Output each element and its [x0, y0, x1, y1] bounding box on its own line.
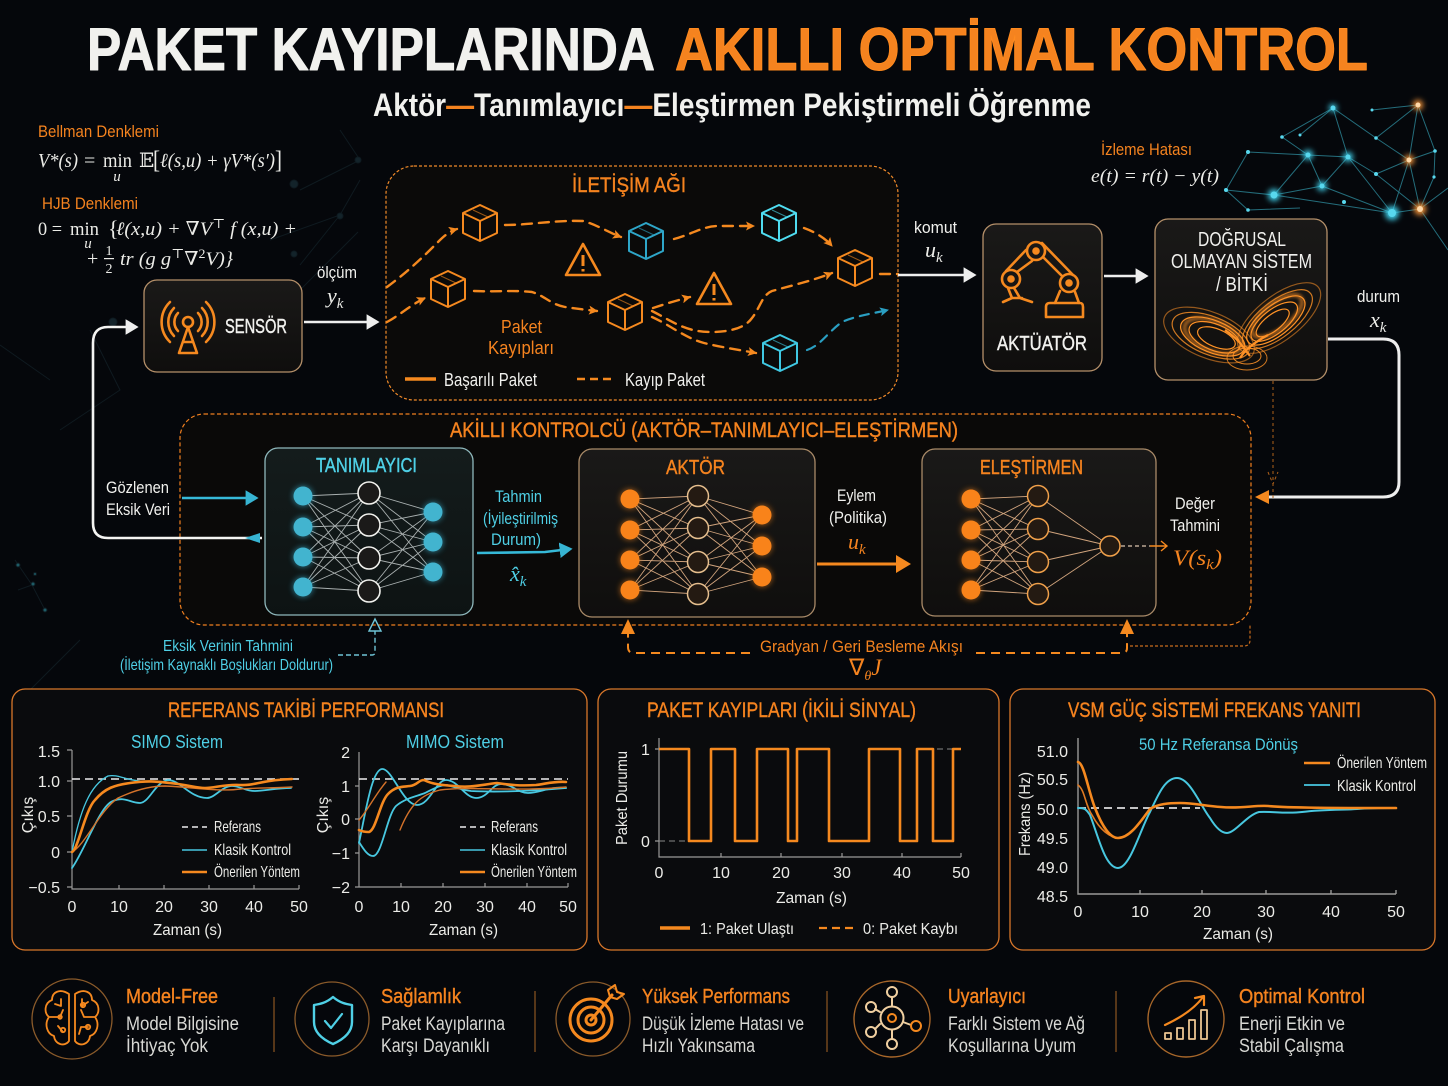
- arrow: network to actuator: [898, 274, 974, 276]
- sensor label: SENSÖR: [225, 316, 287, 338]
- equation: Bellman: ]: [275, 147, 282, 174]
- warning icons: [566, 244, 731, 304]
- equation: Bellman: min: [103, 150, 132, 172]
- feature text: Optimal Kontrol: [1239, 986, 1365, 1008]
- chart: frequency response: 51.0: [1037, 744, 1068, 761]
- feature text: İhtiyaç Yok: [126, 1036, 208, 1057]
- chart: frequency response: [1017, 735, 1427, 943]
- panel: nonlinear plant: [1155, 219, 1332, 380]
- feature: robustness: [295, 982, 505, 1057]
- label: gradient feedback: J: [871, 655, 883, 680]
- label: estimate: (İyileştirilmiş: [483, 509, 558, 528]
- dashed blue packet route: [807, 310, 888, 350]
- feature text: Stabil Çalışma: [1239, 1036, 1344, 1057]
- background network: faint left: [0, 130, 361, 700]
- identifier heading: TANIMLAYICI: [316, 455, 417, 477]
- icon: brain: [32, 979, 112, 1059]
- label: tracking error: İzleme Hatası: [1101, 140, 1192, 159]
- panel: critic: [922, 449, 1156, 616]
- chart: binary packet signal: [614, 738, 970, 938]
- subtitle: Aktör—Tanımlayıcı—Eleştirmen Pekiştirmeli Öğrenme: [373, 87, 1091, 123]
- packet cubes: [431, 205, 872, 371]
- label: estimate: Tahmin: [495, 487, 542, 506]
- arrow: actuator to plant: [1104, 275, 1146, 277]
- panel: VSM frequency response: [1010, 689, 1435, 950]
- packet loss label: [488, 317, 554, 358]
- label: value estimate: k: [1206, 557, 1214, 573]
- label: tracking error: [1091, 140, 1219, 187]
- title: AKILLI OPTİMAL KONTROL: [675, 16, 1368, 83]
- label: command: u: [925, 237, 936, 262]
- icon: hub: [854, 981, 930, 1057]
- chart: binary packet signal: 40: [893, 865, 911, 882]
- chart: SIMO system: 30: [200, 899, 218, 916]
- feature text: Sağlamlık: [381, 986, 462, 1008]
- feature text: Paket Kayıplarına: [381, 1014, 505, 1035]
- plant title: / BİTKİ: [1216, 273, 1268, 296]
- feature: model-free: [32, 979, 239, 1059]
- chart: SIMO system: 1.5: [38, 744, 60, 761]
- feature text: Düşük İzleme Hatası ve: [642, 1014, 804, 1035]
- panel: sensor: [144, 280, 302, 372]
- label: state: durum: [1357, 287, 1400, 306]
- label: value estimate: V(s: [1173, 545, 1202, 570]
- chart: MIMO system: Önerilen Yöntem: [491, 863, 577, 881]
- panel: packet losses: [598, 689, 999, 950]
- chart: SIMO system: 10: [110, 899, 128, 916]
- label: state: k: [1380, 320, 1387, 336]
- chart: SIMO system: Önerilen Yöntem: [214, 863, 300, 881]
- label: value estimate: [1170, 494, 1222, 573]
- chart: frequency response: Klasik Kontrol: [1337, 778, 1416, 795]
- chart: MIMO system: −2: [332, 880, 350, 897]
- chart: frequency response: 30: [1257, 904, 1275, 921]
- feature text: [948, 986, 1085, 1057]
- neural net nodes: [620, 486, 772, 604]
- neural net edges: [630, 496, 762, 594]
- chart: binary packet signal: 1: Paket Ulaştı: [700, 921, 794, 938]
- arrow: critic value output: [1121, 541, 1167, 551]
- equation: HJB: V)}: [206, 249, 233, 270]
- chart: binary packet signal: 0: [641, 834, 650, 851]
- chart: MIMO system: 0: [355, 899, 364, 916]
- equation: HJB: +: [87, 248, 98, 270]
- arrow: observed data to identifier: [182, 497, 256, 499]
- equation: Bellman: =: [84, 150, 95, 172]
- chart: binary packet signal: Zaman (s): [776, 890, 847, 907]
- neural net nodes: [293, 482, 443, 602]
- arrow: identifier to actor: [477, 549, 570, 553]
- chart: frequency response: 50.5: [1037, 772, 1068, 789]
- chart: frequency response: 50 Hz Referansa Dönüş: [1139, 735, 1298, 754]
- chart: SIMO system: 0: [51, 845, 60, 862]
- chart: frequency response: 50.0: [1037, 802, 1068, 819]
- chart: SIMO system: Çıkış: [20, 797, 37, 833]
- chart: SIMO system: 20: [155, 899, 173, 916]
- equation: Bellman: u: [113, 169, 121, 185]
- label: estimate: [483, 487, 558, 590]
- chart: SIMO system: 0: [68, 899, 77, 916]
- icon: sensor antenna: [162, 302, 214, 353]
- chart: SIMO system: SIMO Sistem: [131, 732, 223, 752]
- title: [87, 16, 1368, 83]
- icon: shield: [295, 982, 369, 1056]
- chart: SIMO system: 50: [290, 899, 308, 916]
- equation: Bellman: ℓ(s,u) + γV*(s′): [160, 150, 275, 172]
- feature: high performance: [556, 982, 804, 1057]
- plant title: [1171, 228, 1312, 296]
- icon: target: [556, 982, 630, 1056]
- chart: MIMO system: 30: [476, 899, 494, 916]
- chart: MIMO system: Klasik Kontrol: [491, 842, 567, 859]
- title: PAKET KAYIPLARINDA: [87, 16, 655, 83]
- equation: HJB: ⊤: [212, 216, 225, 231]
- chart: frequency response: 48.5: [1037, 889, 1068, 906]
- chart: SIMO system: 40: [245, 899, 263, 916]
- callout: missing data estimation: [120, 619, 381, 674]
- feature text: [381, 986, 505, 1057]
- chart: SIMO system: 1.0: [38, 774, 60, 791]
- feature: optimal control: [1148, 981, 1365, 1057]
- label: value estimate: Değer: [1175, 494, 1215, 513]
- equation: HJB: 1: [106, 244, 112, 259]
- panel: identifier: [265, 448, 473, 615]
- equation: HJB: 2: [199, 246, 206, 261]
- panel: reference tracking performance: [12, 689, 587, 950]
- arrow: plant dotted to controller: [1268, 381, 1278, 500]
- chart: frequency response: 49.0: [1037, 860, 1068, 877]
- label: action policy: (Politika): [829, 508, 887, 527]
- equation: HJB: min: [70, 219, 99, 240]
- equation: Bellman: 𝔼: [139, 150, 154, 172]
- panel: actuator: [983, 224, 1102, 371]
- chart: frequency response: 10: [1131, 904, 1149, 921]
- network legend: Başarılı Paket: [444, 370, 537, 390]
- label: gradient feedback: Gradyan / Geri Besleme Akışı: [760, 637, 963, 656]
- network heading: İLETİŞİM AĞI: [572, 174, 686, 197]
- controller heading: AKİLLI KONTROLCÜ (AKTÖR–TANIMLAYICI–ELEŞTİRMEN): [450, 419, 958, 442]
- chart: MIMO system: 1: [341, 779, 350, 796]
- panel heading: PAKET KAYIPLARI (İKİLİ SİNYAL): [647, 699, 916, 722]
- critic heading: ELEŞTİRMEN: [980, 456, 1083, 479]
- chart: SIMO system: [20, 732, 308, 939]
- feature text: [642, 986, 804, 1057]
- equation: HJB: tr (g g: [120, 249, 168, 270]
- callout: missing data estimation: Eksik Verinin Tahmini: [163, 638, 293, 655]
- chart: frequency response: 20: [1193, 904, 1211, 921]
- callout: missing data estimation: (İletişim Kaynaklı Boşlukları Doldurur): [120, 655, 333, 674]
- packet loss label: Paket: [501, 317, 542, 337]
- equation: Bellman: [: [153, 147, 160, 174]
- equation: Bellman: V*(s): [38, 150, 78, 172]
- label: observed missing data: Eksik Veri: [106, 500, 170, 519]
- label: gradient feedback: [760, 637, 963, 684]
- chart: frequency response: Frekans (Hz): [1017, 772, 1034, 856]
- chart: frequency response: 0: [1074, 904, 1083, 921]
- chart: MIMO system: −1: [332, 846, 350, 863]
- arrow: gradient feedback flow: [621, 619, 1250, 653]
- label: action policy: [829, 486, 887, 558]
- label: measurement: k: [337, 296, 344, 312]
- chart: frequency response: 49.5: [1037, 831, 1068, 848]
- chart: binary packet signal: 0: Paket Kaybı: [863, 921, 958, 938]
- dashed orange packet routes: [387, 221, 898, 353]
- chart: MIMO system: Çıkış: [315, 797, 332, 833]
- packet loss label: Kayıpları: [488, 338, 554, 358]
- chart: binary packet signal: 10: [712, 865, 730, 882]
- label: action policy: k: [859, 542, 866, 558]
- feature text: Yüksek Performans: [642, 986, 790, 1008]
- equation: Bellman: [38, 122, 282, 185]
- arrow: sensor to network: [304, 321, 377, 323]
- label: measurement: ölçüm: [317, 263, 357, 282]
- label: estimate: x̂: [510, 561, 520, 586]
- chart: MIMO system: 40: [518, 899, 536, 916]
- plant title: DOĞRUSAL: [1198, 228, 1286, 251]
- panel heading: VSM GÜÇ SİSTEMİ FREKANS YANITI: [1068, 699, 1361, 722]
- label: command: k: [936, 250, 943, 266]
- label: action policy: Eylem: [837, 486, 876, 505]
- label: estimate: k: [520, 574, 527, 590]
- feature text: Model-Free: [126, 986, 218, 1008]
- equation: HJB: ∇: [184, 249, 199, 270]
- label: state: x: [1370, 307, 1380, 332]
- label: value estimate: ): [1211, 545, 1222, 570]
- actor heading: AKTÖR: [666, 457, 725, 479]
- panel: intelligent controller: [180, 414, 1251, 625]
- network legend: [405, 370, 705, 390]
- equation: HJB: [38, 194, 297, 277]
- arrow: plant state feedback to controller: [1255, 339, 1399, 504]
- label: tracking error: e(t) = r(t) − y(t): [1091, 166, 1219, 187]
- feature text: [1239, 986, 1365, 1057]
- feature text: Koşullarına Uyum: [948, 1036, 1076, 1057]
- label: estimate: Durum): [491, 530, 541, 549]
- node glows: [1268, 100, 1426, 220]
- label: command: [914, 218, 957, 266]
- feature text: Karşı Dayanıklı: [381, 1036, 490, 1057]
- chart: SIMO system: Referans: [214, 819, 261, 836]
- plant title: OLMAYAN SİSTEM: [1171, 250, 1312, 273]
- label: measurement: y: [327, 283, 337, 308]
- chart: binary packet signal: 30: [833, 865, 851, 882]
- label: action policy: u: [848, 529, 859, 554]
- network legend: Kayıp Paket: [625, 370, 705, 390]
- feature: adaptive: [854, 981, 1085, 1057]
- equation: HJB: f (x,u) +: [225, 219, 297, 240]
- chart: binary packet signal: Paket Durumu: [614, 751, 631, 845]
- feature text: Enerji Etkin ve: [1239, 1014, 1345, 1035]
- panel: actor: [579, 449, 815, 617]
- chart: MIMO system: Zaman (s): [429, 922, 498, 939]
- label: value estimate: Tahmini: [1170, 516, 1220, 535]
- label: command: komut: [914, 218, 957, 237]
- equation: Bellman: Bellman Denklemi: [38, 122, 159, 141]
- chart: SIMO system: −0.5: [28, 880, 60, 897]
- chart: MIMO system: MIMO Sistem: [406, 732, 504, 752]
- chart: lorenz attractor: [1156, 270, 1332, 374]
- panel heading: REFERANS TAKİBİ PERFORMANSI: [168, 699, 444, 722]
- chart: MIMO system: [315, 732, 577, 939]
- chart: MIMO system: 0: [341, 812, 350, 829]
- feature text: Farklı Sistem ve Ağ: [948, 1014, 1085, 1035]
- arrow: actor to critic: [817, 562, 908, 566]
- equation: HJB: HJB Denklemi: [42, 194, 138, 213]
- chart: binary packet signal: 20: [772, 865, 790, 882]
- chart: MIMO system: Referans: [491, 819, 538, 836]
- chart: MIMO system: 20: [434, 899, 452, 916]
- chart: SIMO system: 0.5: [38, 809, 60, 826]
- neural net edges: [971, 496, 1110, 594]
- chart: binary packet signal: 1: [641, 742, 650, 759]
- feature text: Uyarlayıcı: [948, 986, 1026, 1008]
- chart: frequency response: Zaman (s): [1203, 926, 1273, 943]
- arrow: sensor feedback loop: [93, 327, 262, 543]
- label: gradient feedback: θ: [864, 669, 871, 684]
- label: observed missing data: [106, 478, 170, 519]
- chart: binary packet signal: 0: [655, 865, 664, 882]
- equation: HJB: ⊤: [171, 246, 184, 261]
- neural net edges: [303, 493, 433, 591]
- icon: rising bars: [1148, 981, 1224, 1057]
- label: gradient feedback: ∇: [849, 655, 864, 680]
- feature text: Hızlı Yakınsama: [642, 1036, 755, 1057]
- equation: HJB: ℓ(x,u) + ∇V: [116, 219, 206, 240]
- label: measurement: [317, 263, 357, 312]
- arrow: callout to identifier: [338, 619, 381, 655]
- equation: HJB: u: [84, 236, 92, 252]
- neural net nodes: [961, 486, 1120, 604]
- equation: HJB: 2: [106, 262, 112, 277]
- label: observed missing data: Gözlenen: [106, 478, 169, 497]
- chart: MIMO system: 50: [559, 899, 577, 916]
- actuator label: AKTÜATÖR: [997, 333, 1087, 355]
- chart: binary packet signal: 50: [952, 865, 970, 882]
- chart: SIMO system: Klasik Kontrol: [214, 842, 291, 859]
- equation: HJB: 0 =: [38, 219, 62, 240]
- background network: top right glowing nodes: [1224, 100, 1448, 250]
- feature text: Model Bilgisine: [126, 1014, 239, 1035]
- chart: SIMO system: Zaman (s): [153, 922, 222, 939]
- chart: MIMO system: 2: [341, 745, 350, 762]
- chart: frequency response: 50: [1387, 904, 1405, 921]
- chart: frequency response: 40: [1322, 904, 1340, 921]
- equation: HJB: {: [108, 216, 119, 241]
- icon: robot arm: [1002, 242, 1083, 317]
- panel: communication network: [386, 166, 898, 400]
- chart: MIMO system: 10: [392, 899, 410, 916]
- label: state: [1357, 287, 1400, 336]
- feature text: [126, 986, 239, 1057]
